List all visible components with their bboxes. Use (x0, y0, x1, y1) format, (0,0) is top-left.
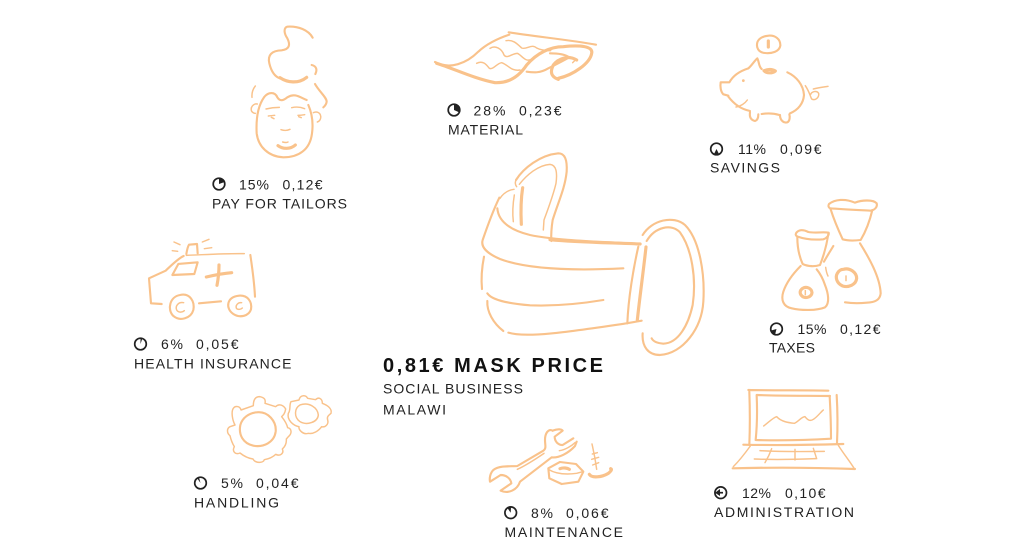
text block: mask price title: SOCIAL BUSINESS (383, 380, 523, 396)
stat: health insurance: 6% (161, 336, 183, 352)
icon: face of tailor (251, 27, 327, 157)
stat: taxes: TAXES (769, 340, 815, 356)
stat: health insurance: HEALTH INSURANCE (134, 356, 292, 372)
icon: ambulance (149, 239, 255, 319)
icon: face mask (482, 153, 704, 355)
stat: maintenance (490, 429, 623, 540)
stat: administration: ADMINISTRATION (714, 504, 854, 520)
stat: material: 28% (474, 102, 506, 118)
pie icon: 5% (195, 477, 206, 489)
stat: handling: 0,04€ (256, 475, 299, 491)
stat: material: 0,23€ (519, 102, 562, 118)
pie icon: 8% (505, 507, 516, 518)
stat: administration: 12% (742, 485, 771, 501)
text block: mask price title (383, 355, 603, 418)
stat: administration: 0,10€ (785, 485, 826, 501)
icon: gears (227, 396, 331, 462)
pie icon: 28% (448, 104, 460, 116)
pie icon: 12% (715, 487, 726, 499)
stat: taxes (769, 200, 881, 356)
pie icon: 11% (711, 143, 722, 155)
stat: maintenance: 0,06€ (566, 505, 609, 521)
stat: taxes: 15% (798, 321, 826, 337)
stat: pay for tailors: 15% (239, 176, 269, 192)
stat: savings: 0,09€ (780, 141, 822, 157)
stat: maintenance: MAINTENANCE (504, 524, 623, 540)
stat: pay for tailors (212, 176, 347, 212)
stat: savings: 11% (738, 141, 766, 157)
stat: material: MATERIAL (448, 122, 523, 138)
text block: mask price title: 0,81€ MASK PRICE (383, 355, 603, 377)
stat: savings (710, 141, 822, 176)
icon: money bags (782, 200, 881, 310)
icon: piggy bank with coin (720, 36, 828, 123)
icon: fabric material (435, 32, 596, 83)
stat: maintenance: 8% (531, 505, 553, 521)
stat: pay for tailors: 0,12€ (282, 176, 323, 192)
stat: material (448, 102, 562, 138)
icon: wrench, nut and screw (490, 429, 611, 492)
stat: savings: SAVINGS (710, 160, 780, 176)
stat: handling: 5% (221, 475, 243, 491)
icon: laptop with chart (733, 390, 855, 469)
stat: handling: HANDLING (194, 494, 279, 510)
stat: taxes: 0,12€ (840, 321, 881, 337)
pie icon: 15% (213, 178, 225, 190)
text block: mask price title: MALAWI (383, 402, 446, 418)
stat: administration (714, 390, 855, 520)
stat: handling (194, 396, 331, 510)
stat: health insurance: 0,05€ (196, 336, 239, 352)
pie icon: 6% (135, 338, 146, 350)
pie icon: 15% (771, 323, 782, 335)
stat: health insurance (134, 239, 292, 372)
stat: pay for tailors: PAY FOR TAILORS (212, 196, 347, 212)
